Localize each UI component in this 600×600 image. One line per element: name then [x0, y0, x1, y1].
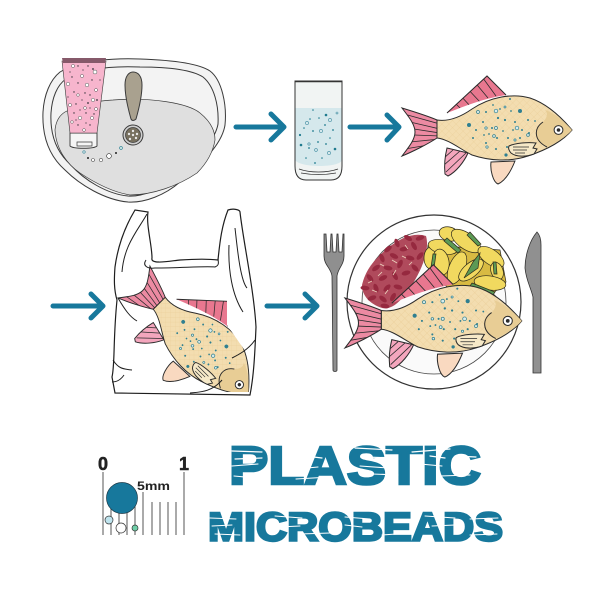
arrow 3 [53, 294, 103, 318]
knife [525, 232, 541, 373]
white bead [116, 523, 126, 533]
title distress streaks [210, 448, 498, 535]
fish on plate [345, 263, 522, 377]
label 1: 1 [179, 454, 189, 474]
green bead [132, 525, 138, 531]
large bead [106, 482, 138, 514]
label 5mm: 5mm [137, 479, 170, 493]
toothpaste tube [62, 58, 106, 148]
fish: swimming [402, 74, 572, 184]
label 0: 0 [98, 454, 108, 474]
fork [324, 234, 344, 372]
title line 1: PLASTIC [229, 436, 481, 496]
scale ruler [98, 454, 189, 535]
glass of water [295, 81, 342, 180]
arrow 2 [350, 115, 399, 140]
arrow 1 [236, 114, 284, 140]
bag outline [112, 209, 256, 395]
ruler ticks [103, 472, 184, 535]
blue bead [105, 516, 113, 524]
title [208, 436, 503, 550]
sink basin outline [43, 59, 225, 202]
potatoes [424, 225, 508, 303]
plate of food [345, 215, 522, 389]
bag fill [112, 210, 255, 395]
arrow 4 [267, 294, 317, 318]
sink [43, 58, 225, 202]
tap [125, 72, 142, 120]
basin bowl [55, 99, 215, 195]
fish in bag [117, 264, 250, 392]
plate [347, 215, 521, 389]
beans [360, 234, 427, 309]
water [295, 108, 342, 166]
plastic bag with fish [111, 208, 257, 396]
title line 2: MICROBEADS [208, 506, 503, 550]
drain [123, 125, 143, 145]
microbeads trail [83, 147, 122, 162]
